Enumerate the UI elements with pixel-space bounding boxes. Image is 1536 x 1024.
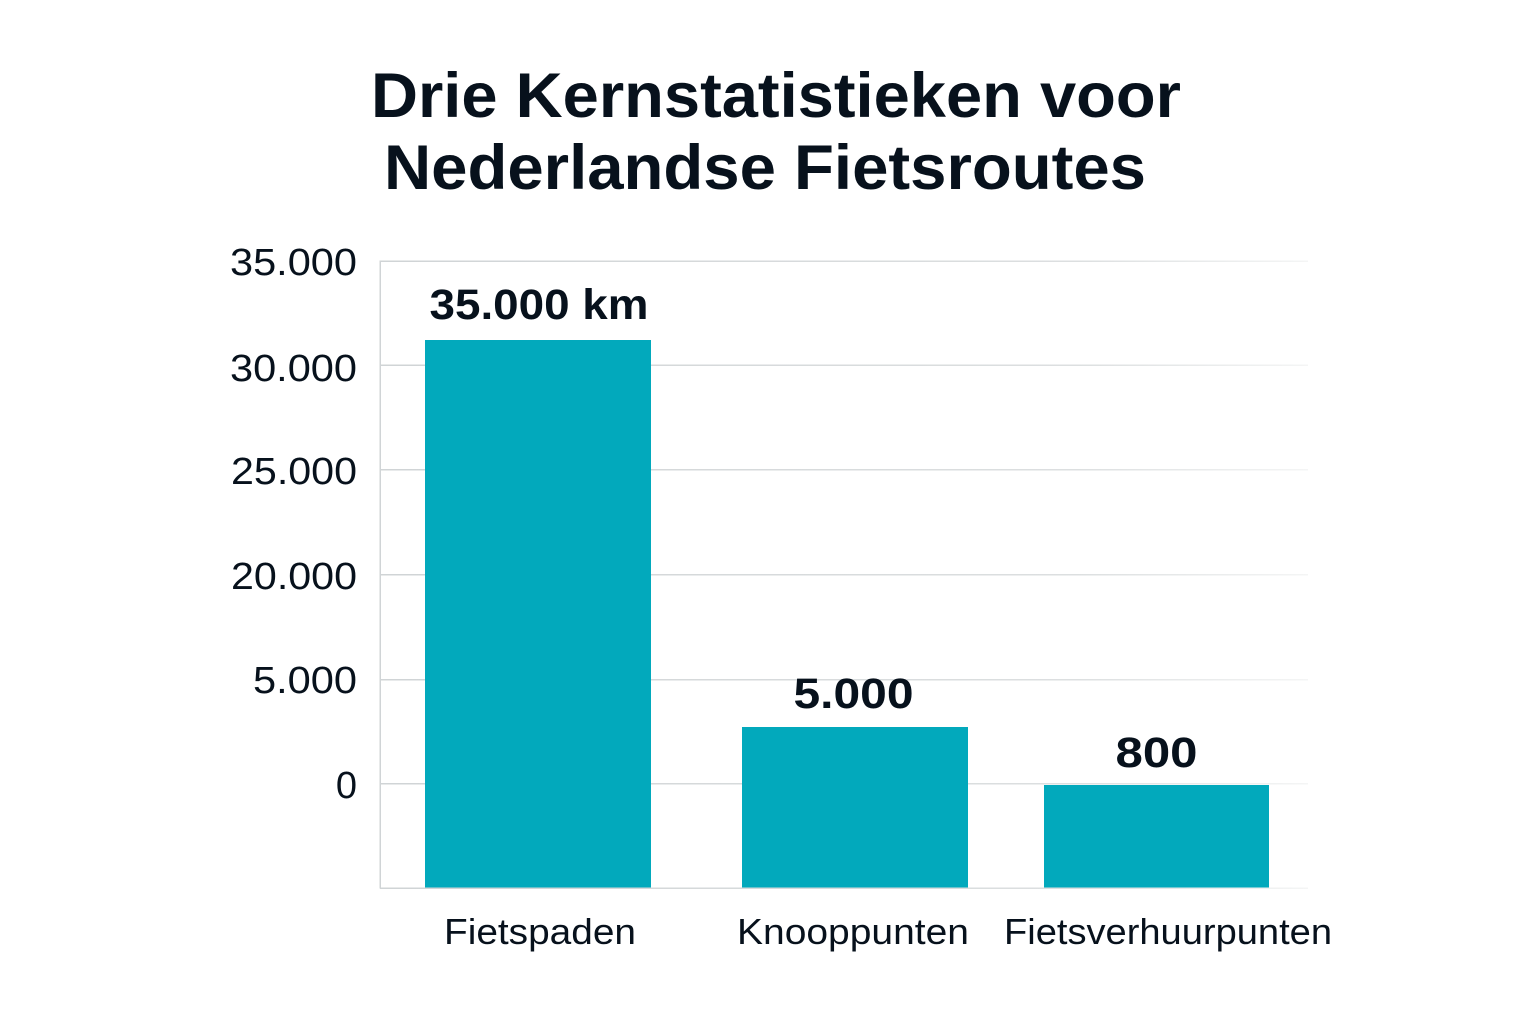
title bbox=[371, 61, 1181, 203]
value labels bbox=[430, 281, 1198, 777]
category labels: Fietsverhuurpunten bbox=[1004, 911, 1332, 952]
y-axis labels bbox=[230, 242, 357, 807]
y-axis labels: 30.000 bbox=[230, 348, 357, 390]
grid lines and axes bbox=[380, 260, 1308, 889]
category labels bbox=[444, 911, 1332, 952]
bar: Fietsverhuurpunten bbox=[1044, 785, 1269, 888]
y-axis labels: 0 bbox=[336, 765, 357, 807]
value labels: 800 bbox=[1116, 729, 1198, 777]
title: Drie Kernstatistieken voor bbox=[371, 61, 1181, 131]
value labels: 5.000 bbox=[794, 670, 914, 718]
bar: Fietspaden bbox=[425, 340, 651, 888]
chart bbox=[230, 242, 1332, 952]
y-axis labels: 25.000 bbox=[231, 451, 357, 493]
y-axis labels: 5.000 bbox=[253, 660, 357, 702]
bar: Knooppunten bbox=[742, 727, 968, 888]
value labels: 35.000 km bbox=[430, 281, 648, 329]
y-axis labels: 20.000 bbox=[231, 556, 357, 598]
title: Nederlandse Fietsroutes bbox=[384, 133, 1146, 203]
category labels: Knooppunten bbox=[737, 911, 969, 952]
y-axis labels: 35.000 bbox=[230, 242, 357, 284]
category labels: Fietspaden bbox=[444, 911, 636, 952]
